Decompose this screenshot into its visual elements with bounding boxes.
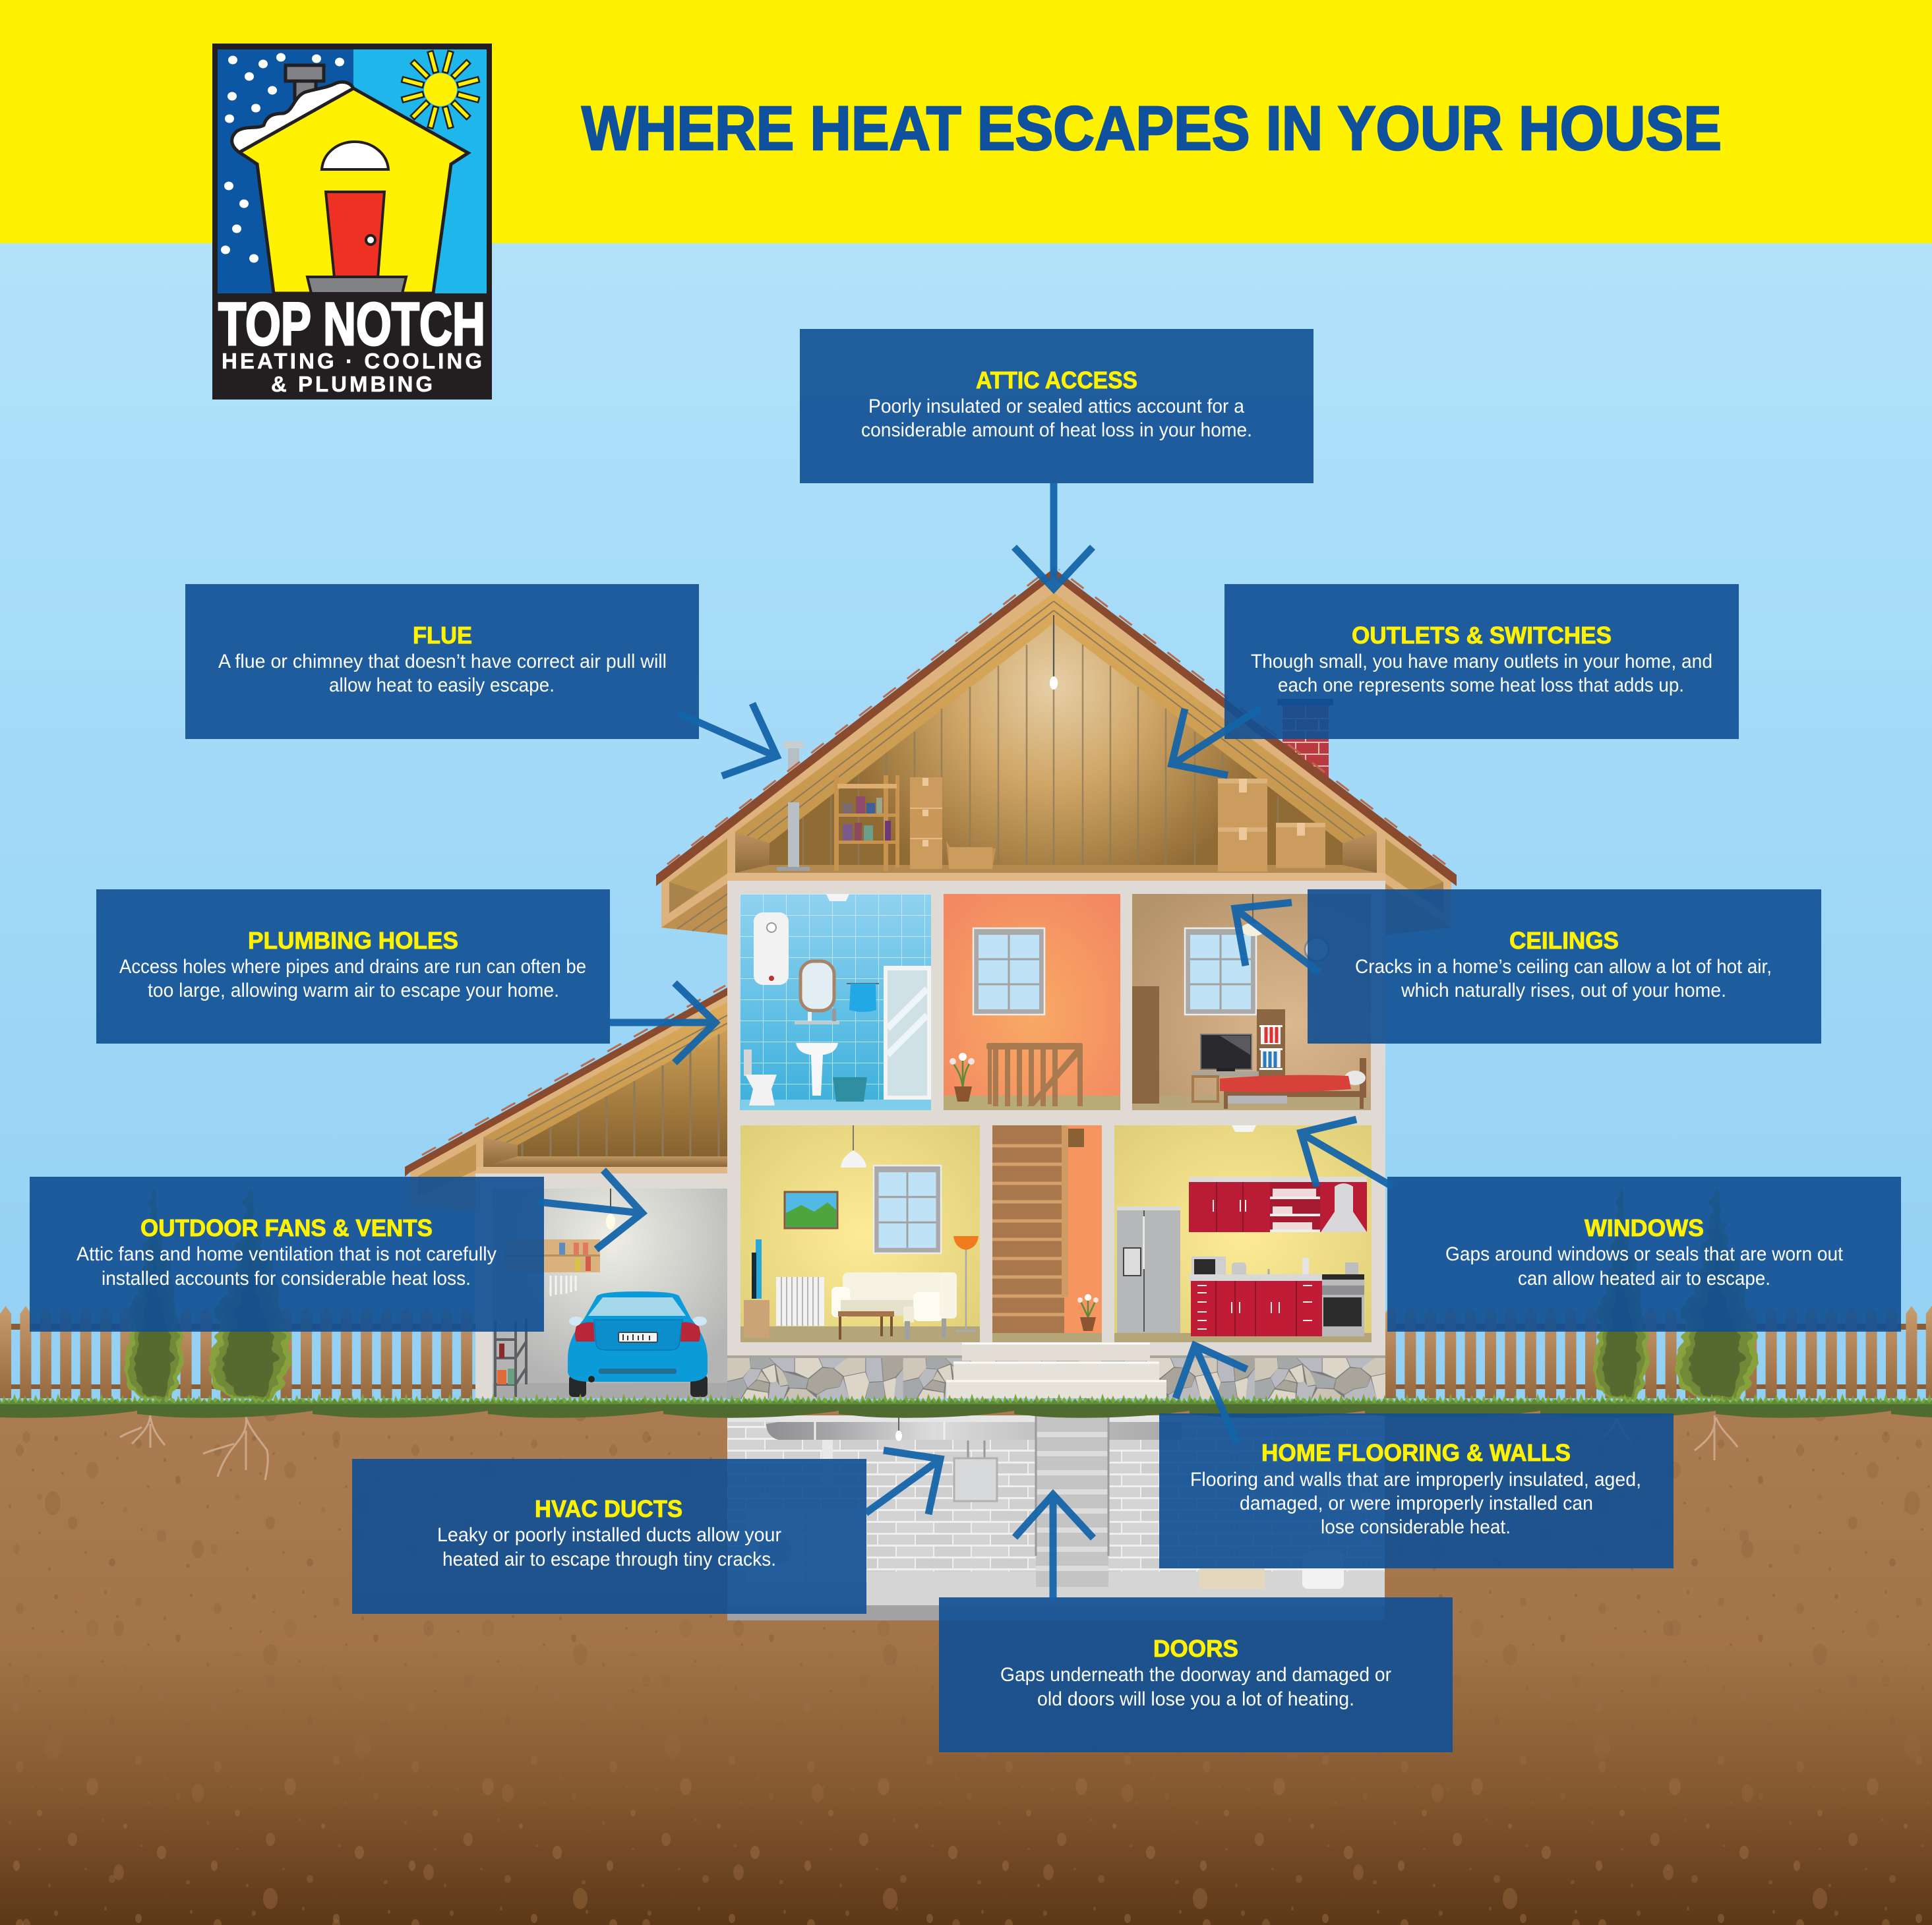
basement bulb	[895, 1415, 902, 1441]
heading: OUTLETS & SWITCHES	[1352, 622, 1612, 649]
logo tagline line two: & PLUMBING	[271, 372, 433, 396]
attic floor	[735, 865, 1377, 873]
bed	[1220, 1058, 1366, 1109]
description: Leaky or poorly installed ducts allow your	[437, 1524, 781, 1546]
arrow: ceilings	[1235, 903, 1319, 972]
arrow: flue	[679, 703, 777, 776]
description: damaged, or were improperly installed can	[1240, 1493, 1593, 1514]
sink	[796, 1043, 838, 1096]
ceiling lamp	[1241, 894, 1265, 936]
description: too large, allowing warm air to escape your home.	[148, 980, 559, 1001]
garage roof tan band	[476, 993, 727, 1173]
panel: hvac ducts	[352, 1459, 866, 1614]
basement stairs	[1036, 1415, 1108, 1587]
attic shelves	[834, 775, 899, 871]
radiator	[776, 1277, 824, 1326]
golden rafters	[735, 593, 1377, 873]
roof tiles	[656, 568, 1457, 886]
tree roots	[120, 1415, 1737, 1480]
arrow: hvac ducts	[866, 1450, 940, 1514]
living tv	[752, 1239, 762, 1299]
description: Gaps around windows or seals that are worn out	[1445, 1243, 1844, 1265]
panel: ceilings	[1308, 889, 1821, 1044]
description	[1445, 1243, 1844, 1289]
bathroom	[740, 894, 931, 1110]
floor lamp	[953, 1236, 979, 1332]
water tank	[1302, 1551, 1344, 1589]
panel: windows	[1387, 1177, 1901, 1332]
mirror	[800, 961, 834, 1011]
logo door	[326, 192, 384, 278]
white pipe	[822, 1440, 833, 1486]
garage rafters	[483, 1002, 727, 1167]
header band	[0, 0, 1932, 243]
heading: HOME FLOORING & WALLS	[1261, 1439, 1571, 1466]
description	[1251, 651, 1712, 696]
arrow: windows	[1301, 1119, 1393, 1187]
stone foundation	[727, 1358, 1385, 1399]
tv stand	[744, 1300, 770, 1338]
main house walls	[727, 881, 1385, 1358]
panel: doors	[939, 1597, 1453, 1752]
basket	[833, 1077, 867, 1102]
logo tagline line one: HEATING · COOLING	[222, 349, 482, 373]
description: Attic fans and home ventilation that is not carefully	[76, 1243, 497, 1265]
arrow: plumbing holes	[610, 983, 715, 1063]
soil ground	[0, 1411, 1932, 1925]
stair railing	[986, 1043, 1083, 1106]
electrical panel	[954, 1440, 997, 1501]
heading: CEILINGS	[1509, 927, 1619, 954]
description	[861, 396, 1252, 441]
arrow: outlets and switches	[1172, 708, 1261, 775]
panel: flue	[185, 584, 699, 739]
left eave	[661, 828, 727, 935]
panel: outdoor fans and vents	[30, 1177, 544, 1332]
panel: attic access	[800, 329, 1313, 483]
stairwell	[992, 1125, 1102, 1342]
desk	[1193, 1071, 1259, 1102]
blender and appliances	[1232, 1258, 1358, 1278]
garage eave	[410, 1135, 476, 1212]
description: each one represents some heat loss that adds up.	[1278, 674, 1684, 696]
description: heated air to escape through tiny cracks.	[442, 1549, 776, 1570]
picture	[785, 1192, 837, 1228]
description: Flooring and walls that are improperly insulated, aged,	[1190, 1469, 1641, 1491]
arrow: attic access	[1014, 483, 1093, 589]
description	[437, 1524, 781, 1570]
garage shelf	[504, 1239, 600, 1272]
upper cabinets	[1189, 1177, 1367, 1232]
heading: PLUMBING HOLES	[248, 927, 458, 954]
description	[76, 1243, 497, 1289]
attic boxes right	[1218, 779, 1325, 872]
logo day sky	[353, 49, 487, 293]
description: considerable amount of heat loss in your home.	[861, 419, 1252, 441]
logo window	[322, 142, 388, 169]
title: WHERE HEAT ESCAPES IN YOUR HOUSE	[582, 94, 1722, 163]
logo snowflakes	[221, 53, 344, 262]
logo chimney	[286, 65, 324, 99]
bookcase	[1257, 1009, 1285, 1077]
heading: FLUE	[413, 622, 472, 649]
duct	[766, 1422, 1182, 1440]
counter and lower cabinets	[1189, 1274, 1322, 1336]
heading: ATTIC ACCESS	[976, 367, 1137, 394]
pendant lamp	[841, 1125, 866, 1168]
flue pipe outside	[782, 741, 805, 775]
description: can allow heated air to escape.	[1518, 1268, 1770, 1289]
metal rack	[495, 1318, 526, 1397]
shower	[884, 966, 931, 1100]
arrow: doors	[1015, 1495, 1093, 1600]
description: Access holes where pipes and drains are run can often be	[119, 956, 586, 978]
knee walls	[735, 832, 770, 873]
closet door	[1132, 986, 1159, 1104]
living room	[740, 1125, 980, 1342]
description	[218, 651, 667, 696]
washer and dryer	[745, 1510, 867, 1582]
trees	[125, 1184, 1758, 1398]
heading: OUTDOOR FANS & VENTS	[140, 1214, 433, 1241]
hallway window	[973, 928, 1044, 1015]
logo night sky	[218, 49, 353, 293]
panel: outlets and switches	[1224, 584, 1739, 739]
hallway orange room	[944, 894, 1120, 1110]
garage roof tiles	[405, 986, 727, 1177]
logo house	[239, 88, 468, 293]
attic and main roof	[656, 568, 1457, 935]
sky background	[0, 243, 1932, 1417]
description: Though small, you have many outlets in your home, and	[1251, 651, 1712, 672]
garage wall	[475, 1173, 727, 1189]
coffee table	[838, 1311, 894, 1340]
picket fence right	[1385, 1306, 1932, 1398]
water heater	[754, 912, 789, 985]
ceiling light	[1232, 1125, 1256, 1132]
sofa	[831, 1272, 957, 1340]
garage	[405, 986, 727, 1398]
garage attic interior	[518, 1030, 727, 1156]
wall clock	[1305, 937, 1329, 961]
basement	[727, 1415, 1385, 1620]
attic boxes left	[910, 777, 997, 869]
fridge	[1117, 1206, 1180, 1333]
bedroom tv	[1201, 1034, 1252, 1071]
towel	[847, 984, 879, 1012]
logo sun	[402, 51, 479, 129]
hallway plant	[950, 1053, 975, 1102]
storage box	[1199, 1568, 1265, 1589]
wrenches	[551, 1276, 576, 1296]
logo snow on roof	[232, 82, 353, 152]
chimney	[1277, 699, 1333, 791]
description: Gaps underneath the doorway and damaged or	[1000, 1664, 1391, 1686]
description: Cracks in a home’s ceiling can allow a lot of hot air,	[1355, 956, 1772, 978]
toilet	[744, 1050, 777, 1106]
description	[1355, 956, 1772, 1001]
entry steps	[946, 1342, 1166, 1398]
arrow: outdoor fans and vents	[537, 1170, 642, 1249]
garage interior	[493, 1189, 727, 1383]
panel: home flooring and walls	[1159, 1413, 1674, 1568]
bath shelf	[795, 1009, 839, 1024]
logo step	[307, 277, 406, 293]
description: installed accounts for considerable heat loss.	[102, 1268, 471, 1289]
staircase	[992, 1125, 1084, 1333]
picket fence left	[0, 1306, 475, 1398]
heading: HVAC DUCTS	[535, 1495, 682, 1522]
attic interior boards	[770, 623, 1343, 865]
description: allow heat to easily escape.	[329, 674, 555, 696]
logo: Top Notch	[212, 44, 492, 400]
kitchen	[1114, 1125, 1372, 1342]
attic bulb	[1050, 615, 1058, 690]
description	[1190, 1469, 1641, 1538]
stove	[1322, 1274, 1364, 1336]
flue pipe in attic	[777, 802, 810, 871]
bedroom	[1132, 894, 1371, 1110]
description: which naturally rises, out of your home.	[1401, 980, 1726, 1001]
garage bulb	[606, 1189, 615, 1229]
microwave	[1192, 1257, 1226, 1278]
description: lose considerable heat.	[1321, 1516, 1511, 1538]
living window	[874, 1166, 941, 1253]
arrow: home flooring and walls	[1176, 1346, 1247, 1443]
stairwell plant	[1077, 1294, 1099, 1331]
right eave	[1385, 828, 1451, 935]
roof tan band	[727, 575, 1385, 881]
ceiling light	[826, 894, 849, 901]
description	[119, 956, 586, 1001]
range hood	[1321, 1183, 1367, 1232]
description	[1000, 1664, 1391, 1710]
heading: WINDOWS	[1585, 1214, 1704, 1241]
description: old doors will lose you a lot of heating.	[1037, 1688, 1354, 1710]
bedroom window	[1185, 928, 1256, 1015]
car	[568, 1291, 708, 1397]
description: A flue or chimney that doesn’t have correct air pull will	[218, 651, 667, 672]
logo name: TOP NOTCH	[218, 291, 485, 358]
panel: plumbing holes	[96, 889, 610, 1044]
grass strip	[0, 1394, 1932, 1419]
basement floor	[727, 1572, 1385, 1605]
heading: DOORS	[1153, 1635, 1238, 1662]
description: Poorly insulated or sealed attics account for a	[868, 396, 1244, 417]
